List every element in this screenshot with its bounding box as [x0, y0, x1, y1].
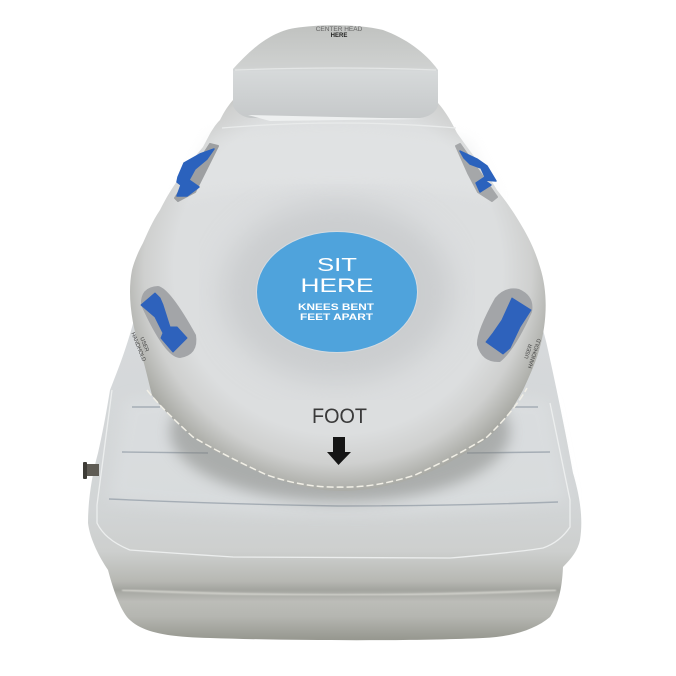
seat instructions: KNEES BENT: [298, 302, 374, 313]
handhold label: right: [521, 336, 543, 369]
icon: down arrow: [327, 437, 351, 465]
stitched seam: [147, 388, 527, 487]
seat heading: SIT: [317, 255, 357, 275]
backrest crease: [222, 123, 456, 128]
head pillow: [233, 25, 438, 121]
handle: lower right: [477, 288, 532, 362]
inflatable ring with backrest: [130, 100, 546, 491]
blue seat circle: [256, 231, 418, 353]
handle: lower left: [141, 286, 196, 358]
handhold label: left: [129, 329, 152, 363]
head pillow: HERE: [331, 33, 347, 39]
mattress base: [88, 320, 581, 640]
seam lines: [97, 390, 570, 558]
tube shadow: [170, 362, 510, 502]
handle: top left: [175, 144, 218, 201]
blue seat circle: FEET APART: [300, 312, 373, 323]
handhold label: left: HANDHOLD: [129, 332, 146, 363]
foot label: FOOT: [312, 405, 367, 428]
handhold label: left: USER: [138, 336, 150, 353]
air valve: [83, 462, 99, 479]
pillow label: CENTER HEAD: [316, 26, 363, 33]
handle: top right: [456, 144, 497, 201]
handhold label: right: USER: [524, 343, 534, 360]
blue seat circle: HERE: [300, 276, 374, 297]
handhold label: right: HANDHOLD: [528, 338, 543, 369]
